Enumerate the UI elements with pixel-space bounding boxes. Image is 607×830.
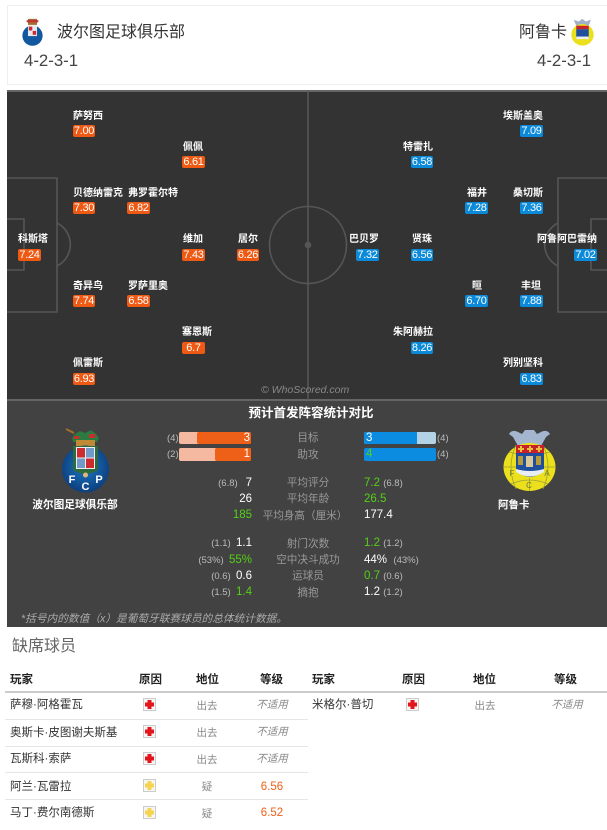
row: 米格尔·普切 bbox=[308, 697, 607, 719]
player: 贤珠 bbox=[411, 233, 433, 261]
formation: Arouca: 4-2-3-1 bbox=[537, 51, 591, 70]
bar: home goals bbox=[179, 432, 251, 444]
pitch markings bbox=[7, 91, 607, 400]
player: 埃斯盖奥: 埃斯盖奥 bbox=[503, 110, 543, 122]
bar: away assists bbox=[364, 448, 436, 461]
player: 维加 bbox=[182, 233, 205, 261]
player: 福井: 7.28 bbox=[466, 202, 487, 214]
player: 列别坚科: 6.83 bbox=[521, 373, 542, 385]
row: 阿兰·瓦雷拉: 疑 bbox=[202, 781, 212, 793]
player: 福井: 福井 bbox=[467, 188, 487, 198]
player: 佩佩: 佩佩 bbox=[183, 142, 203, 152]
row: 萨穆·阿格霍瓦 bbox=[10, 698, 288, 712]
player: 萨努西: 萨努西 bbox=[73, 110, 103, 122]
player: 阿鲁阿巴雷纳 bbox=[537, 233, 597, 261]
stat: aerial duels: 空中决斗成功 bbox=[276, 554, 340, 566]
table header right: 原因 bbox=[402, 674, 425, 686]
player: 科斯塔: 科斯塔 bbox=[18, 234, 48, 244]
row: 阿兰·瓦雷拉: 阿兰·瓦雷拉 bbox=[10, 781, 71, 793]
player: 巴贝罗 bbox=[349, 234, 379, 261]
row: 马丁·费尔南德斯: 6.52 bbox=[261, 807, 283, 819]
table header right: 玩家 bbox=[312, 674, 335, 686]
row: 奥斯卡·皮图谢夫斯基 bbox=[10, 725, 288, 739]
player: 罗萨里奥: 6.58 bbox=[128, 295, 149, 307]
heading: absent players: 缺席球员 bbox=[12, 638, 76, 655]
bar: away goals bbox=[364, 432, 436, 444]
player: 萨努西 bbox=[73, 110, 103, 137]
row: 萨穆·阿格霍瓦: 萨穆·阿格霍瓦 bbox=[10, 699, 83, 711]
icon: Porto crest small bbox=[22, 18, 43, 46]
panel: lineup comparison bbox=[7, 401, 607, 627]
stat: shots: 射门次数 bbox=[287, 538, 329, 550]
team name: Porto: 波尔图足球俱乐部 bbox=[57, 24, 185, 41]
stat: average age: 平均年龄 bbox=[287, 493, 329, 505]
player: 贝德纳雷克 bbox=[73, 187, 123, 214]
player: 丰坦 bbox=[520, 280, 543, 307]
stat: average age: 26 bbox=[239, 493, 252, 505]
player: 贝德纳雷克: 贝德纳雷克 bbox=[73, 188, 123, 198]
bar: home assists bbox=[179, 448, 251, 461]
icon: Porto crest: C bbox=[82, 481, 90, 493]
player: 奇异鸟 bbox=[73, 280, 103, 307]
stat: average rating: 平均评分 bbox=[287, 477, 329, 489]
player: 科斯塔 bbox=[18, 233, 48, 261]
player: 塞恩斯 bbox=[182, 326, 212, 354]
value: away assists average: (4) bbox=[437, 449, 449, 460]
stat: average height: 185 bbox=[233, 509, 252, 521]
player: 塞恩斯: 塞恩斯 bbox=[182, 326, 212, 338]
icon: Porto crest: F bbox=[69, 474, 76, 486]
table header right: 地位 bbox=[473, 674, 496, 686]
player: 佩佩: 6.61 bbox=[183, 156, 204, 168]
player: 居尔 bbox=[237, 233, 259, 261]
player: 贤珠: 6.56 bbox=[412, 249, 432, 261]
row: 瓦斯科·索萨: 瓦斯科·索萨 bbox=[10, 753, 71, 765]
player: 巴贝罗: 巴贝罗 bbox=[349, 234, 379, 244]
table header right: 等级 bbox=[554, 674, 577, 686]
row: 奥斯卡·皮图谢夫斯基: 不适用 bbox=[256, 726, 288, 738]
icon: Arouca crest: C bbox=[526, 481, 532, 490]
player: 佩佩 bbox=[182, 141, 205, 168]
footnote: *括号内的数值（x）是葡萄牙联赛球员的总体统计数据。 bbox=[21, 613, 287, 625]
row: 米格尔·普切: 不适用 bbox=[551, 699, 583, 711]
player: 佩雷斯 bbox=[73, 357, 103, 385]
player: 罗萨里奥 bbox=[127, 280, 168, 307]
value: home assists average: (2) bbox=[167, 449, 179, 460]
table header left: 等级 bbox=[260, 674, 283, 686]
stat: tackles bbox=[211, 586, 403, 599]
label: Arouca: 阿鲁卡 bbox=[498, 499, 530, 511]
row: 奥斯卡·皮图谢夫斯基: 奥斯卡·皮图谢夫斯基 bbox=[10, 727, 117, 739]
player: 居尔: 居尔 bbox=[238, 234, 258, 244]
row: 瓦斯科·索萨 bbox=[5, 751, 308, 773]
formation: Porto: 4-2-3-1 bbox=[24, 51, 78, 70]
stat: average rating: (6.8) 7 bbox=[218, 477, 252, 489]
stat: average rating bbox=[218, 476, 403, 489]
away players bbox=[349, 110, 597, 385]
icon: Porto crest bbox=[62, 428, 109, 493]
player: 晅: 6.70 bbox=[466, 295, 487, 307]
label: Porto: 波尔图足球俱乐部 bbox=[32, 499, 118, 511]
stat: aerial duels: 44% (43%) bbox=[364, 554, 419, 566]
table header left: 玩家 bbox=[10, 674, 33, 686]
player: 罗萨里奥: 罗萨里奥 bbox=[128, 280, 168, 292]
player: 丰坦: 丰坦 bbox=[521, 280, 541, 292]
row: 瓦斯科·索萨: 不适用 bbox=[256, 753, 288, 765]
value: away goals average: (4) bbox=[437, 433, 449, 444]
player: 晅: 晅 bbox=[472, 280, 482, 292]
stat: average age bbox=[239, 492, 386, 505]
player: 弗罗霍尔特 bbox=[127, 187, 178, 214]
stat: shots: 1.2 (1.2) bbox=[364, 537, 403, 549]
label: goals: 目标 bbox=[297, 432, 319, 444]
player: 朱阿赫拉: 朱阿赫拉 bbox=[393, 326, 433, 338]
stat: dribbles: 运球员 bbox=[292, 570, 324, 582]
player: 奇异鸟: 奇异鸟 bbox=[73, 280, 103, 292]
table header right bbox=[308, 672, 607, 691]
row: 萨穆·阿格霍瓦: 不适用 bbox=[256, 699, 288, 711]
icon: Arouca crest: A bbox=[544, 469, 550, 478]
panel: pitch bbox=[7, 90, 607, 401]
bar: home assists: 1 bbox=[244, 448, 250, 460]
row: 米格尔·普切: 米格尔·普切 bbox=[312, 699, 373, 711]
player: 列别坚科 bbox=[503, 357, 543, 385]
value: home goals average: (4) bbox=[167, 433, 179, 444]
row: 萨穆·阿格霍瓦: 出去 bbox=[196, 700, 218, 712]
home players bbox=[18, 110, 259, 385]
comparison title: 预计首发阵容统计对比 bbox=[248, 406, 374, 420]
table: absent players left bbox=[10, 673, 288, 820]
player: 特雷扎 bbox=[403, 141, 433, 168]
player: 萨努西: 7.00 bbox=[74, 125, 94, 137]
bar: home goals: 3 bbox=[244, 432, 250, 444]
player: 埃斯盖奥 bbox=[503, 110, 543, 137]
player: 科斯塔: 7.24 bbox=[19, 249, 40, 261]
icon: Arouca crest small bbox=[571, 19, 594, 46]
player: 塞恩斯: 6.7 bbox=[186, 342, 201, 354]
player: 居尔: 6.26 bbox=[238, 249, 258, 261]
player: 佩雷斯: 6.93 bbox=[74, 373, 94, 385]
player: 特雷扎: 特雷扎 bbox=[403, 142, 433, 152]
player: 巴贝罗: 7.32 bbox=[357, 249, 378, 261]
player: 弗罗霍尔特: 弗罗霍尔特 bbox=[128, 188, 178, 198]
table header left: 地位 bbox=[196, 674, 219, 686]
player: 贝德纳雷克: 7.30 bbox=[74, 202, 94, 214]
row: 马丁·费尔南德斯: 疑 bbox=[202, 808, 212, 820]
stat: aerial duels: (53%) 55% bbox=[198, 554, 252, 566]
row: 阿兰·瓦雷拉: 6.56 bbox=[261, 781, 283, 793]
player: 晅 bbox=[465, 280, 488, 307]
stat: dribbles: (0.6) 0.6 bbox=[211, 570, 252, 582]
panel: match header bbox=[7, 5, 607, 85]
player: 弗罗霍尔特: 6.82 bbox=[128, 202, 149, 214]
table header left bbox=[10, 673, 283, 686]
player: 朱阿赫拉 bbox=[393, 326, 433, 354]
icon: Arouca crest bbox=[504, 430, 556, 491]
player: 桑切斯: 7.36 bbox=[521, 202, 542, 214]
stat: tackles: 1.2 (1.2) bbox=[364, 586, 403, 598]
row: 阿兰·瓦雷拉 bbox=[5, 779, 308, 801]
player: 列别坚科: 列别坚科 bbox=[503, 358, 543, 368]
row: 奥斯卡·皮图谢夫斯基: 出去 bbox=[196, 727, 218, 739]
player: 维加: 7.43 bbox=[183, 249, 204, 261]
player: 福井 bbox=[465, 187, 488, 214]
stat: average age: 26.5 bbox=[364, 493, 386, 505]
player: 朱阿赫拉: 8.26 bbox=[412, 342, 432, 354]
bar: away assists: 4 bbox=[366, 448, 372, 460]
player: 桑切斯: 桑切斯 bbox=[513, 188, 543, 198]
bar: away goals: 3 bbox=[366, 432, 372, 444]
player: 维加: 维加 bbox=[183, 234, 203, 244]
player: 奇异鸟: 7.74 bbox=[74, 295, 94, 307]
stat: shots bbox=[211, 537, 403, 550]
team name: Arouca: 阿鲁卡 bbox=[519, 24, 567, 41]
stat: average rating: 7.2 (6.8) bbox=[364, 477, 403, 489]
row: 马丁·费尔南德斯: 马丁·费尔南德斯 bbox=[10, 807, 94, 819]
icon: Porto crest: P bbox=[95, 474, 103, 486]
stat: tackles: (1.5) 1.4 bbox=[211, 586, 252, 598]
stat: dribbles: 0.7 (0.6) bbox=[364, 570, 403, 582]
stat: average height: 平均身高（厘米） bbox=[263, 510, 347, 522]
player: 佩雷斯: 佩雷斯 bbox=[73, 358, 103, 368]
player: 贤珠: 贤珠 bbox=[412, 234, 432, 244]
watermark: © WhoScored.com bbox=[261, 384, 349, 396]
stat: average height: 177.4 bbox=[364, 509, 393, 521]
stat: aerial duels bbox=[198, 554, 419, 566]
stat: average height bbox=[233, 509, 393, 522]
player: 丰坦: 7.88 bbox=[521, 295, 542, 307]
player: 阿鲁阿巴雷纳: 阿鲁阿巴雷纳 bbox=[537, 234, 597, 244]
row: 瓦斯科·索萨: 出去 bbox=[196, 754, 218, 766]
icon: Arouca crest: F bbox=[510, 469, 515, 478]
row: 马丁·费尔南德斯 bbox=[5, 805, 308, 827]
row: 米格尔·普切: 出去 bbox=[474, 700, 496, 712]
stat: dribbles bbox=[211, 570, 403, 582]
table header left: 原因 bbox=[139, 674, 162, 686]
player: 桑切斯 bbox=[513, 187, 543, 214]
stat: tackles: 摘抱 bbox=[297, 587, 319, 599]
player: 特雷扎: 6.58 bbox=[412, 156, 432, 168]
player: 阿鲁阿巴雷纳: 7.02 bbox=[575, 249, 596, 261]
player: 埃斯盖奥: 7.09 bbox=[521, 125, 542, 137]
stat: shots: (1.1) 1.1 bbox=[211, 537, 252, 549]
table: absent players right bbox=[308, 672, 607, 720]
label: assists: 助攻 bbox=[297, 449, 319, 461]
